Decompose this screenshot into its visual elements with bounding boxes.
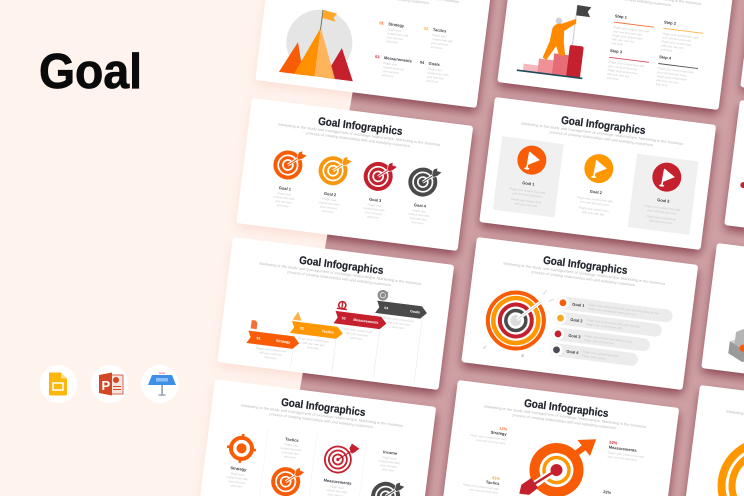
text: 04 Goals <box>417 60 451 85</box>
step 4: your own text and more <box>657 70 687 78</box>
goal pill 1 <box>556 296 673 323</box>
slide intro text: Marketing is the study and management of exchange relationships. Marketing is the business <box>521 122 684 146</box>
text: 04 Goals: content here with <box>427 71 449 77</box>
goal 4: and more <box>412 220 424 226</box>
panel: goal 2: your own text and more <box>580 199 610 207</box>
goal 3: Goal 3 <box>369 196 382 203</box>
text: 02 Tactics <box>422 26 455 51</box>
step 04 Goals: with your own text <box>387 320 410 327</box>
label: 41% Tactics: Plugin your content here with <box>463 482 499 491</box>
label: 12% Strategy: Strategy <box>490 430 508 437</box>
panel: goal 3: Plugin your content here with <box>644 204 681 212</box>
label: 12% Strategy: 12% <box>499 426 508 432</box>
step 2: your own text and more <box>662 35 692 43</box>
slide: mountain goal <box>255 0 492 108</box>
label: 41% Tactics: your own text and more <box>469 487 499 495</box>
step 3: your own text and more <box>608 64 638 71</box>
column: Tactics: content here with <box>280 446 302 452</box>
text: 02 Tactics: Plugin your <box>432 33 446 39</box>
slide: target with arrows and percentages <box>442 380 679 496</box>
pink background panel <box>300 0 744 496</box>
text: 03 Measurements: and more <box>382 73 394 78</box>
goal 4 <box>403 164 443 227</box>
label: 52% Measurements: 52% <box>609 439 618 446</box>
slide heading: Goal Infographics <box>317 116 403 138</box>
slide intro text <box>297 0 460 9</box>
panel: goal 1: your own text and more <box>512 191 542 199</box>
step 03 Measurements <box>332 300 388 344</box>
step 01 Strategy: 01 <box>256 336 261 341</box>
text: 02 Tactics: Tactics <box>433 27 447 34</box>
goal 4: Plugin your <box>412 208 426 214</box>
text: 02 Tactics: and more <box>431 45 443 50</box>
step 2: Plugin your content here <box>661 39 692 47</box>
step 3: Step 3 <box>610 48 623 54</box>
label: 23%: 23% <box>603 489 612 495</box>
column: Strategy <box>222 432 258 490</box>
text: 02 Tactics: 02 <box>424 26 430 31</box>
step 3: Plugin your content here with <box>608 60 645 68</box>
step 1: Plugin your content here with <box>613 25 650 34</box>
step 02 Tactics: with your own text <box>302 341 325 347</box>
label: 41% Tactics <box>462 472 501 495</box>
slide intro text <box>521 122 684 151</box>
slide intro text: process of creating relationships with and satisfying customers. <box>512 413 617 430</box>
goal 2 <box>313 153 353 216</box>
panel: goal 3: Plugin your content here <box>646 214 677 222</box>
slide intro text <box>539 0 702 11</box>
slide heading: Goal Infographics <box>280 397 366 419</box>
goal pill 3 <box>551 327 651 352</box>
icon: PowerPoint: P <box>102 378 110 393</box>
slide intro text: Marketing is the study and management of exchange relationships. Marketing is the business <box>484 405 647 429</box>
column: Measurements: Measurements <box>323 477 353 486</box>
label: 52% Measurements <box>607 439 646 463</box>
slide: concentric target with goal pills <box>461 237 698 390</box>
step 03 Measurements: 03 <box>341 316 346 321</box>
slide: three flag panels <box>479 97 716 250</box>
step 4 <box>655 54 699 91</box>
column: Income: Income <box>383 449 398 456</box>
step 02 Tactics <box>288 311 345 353</box>
step 2 <box>660 19 704 56</box>
step 01 Strategy <box>245 320 301 363</box>
column: Income: your own text <box>380 463 397 469</box>
goal 1: Goal 1 <box>279 185 292 192</box>
panel: goal 2: Goal 2 <box>590 189 603 195</box>
slide intro text: process of creating relationships with and satisfying customers. <box>306 131 411 148</box>
goal 4: Goal 4 <box>413 202 427 209</box>
slide intro text <box>484 405 647 434</box>
goal pill 4: Plugin your content here with <box>582 350 619 358</box>
icon: isometric block <box>727 327 744 364</box>
step 1 <box>611 13 655 50</box>
label: 12% Strategy: your own text and more <box>476 438 506 445</box>
slide heading: Goal Infographics <box>523 398 609 420</box>
slide heading: Goal Infographics <box>560 115 646 137</box>
text: 01 Strategy: and more <box>386 39 399 45</box>
column: Measurements: Plugin your <box>330 484 344 490</box>
goal pill 1: Plugin your content here with your own text and more text <box>588 303 660 315</box>
column: Tactics: and more <box>284 454 296 460</box>
slide intro text: Marketing is the study and management of exchange relationships. Marketing is the business <box>259 262 422 286</box>
text: 04 Goals: your own text <box>427 75 444 81</box>
goal pill 4: Goal 4 <box>566 349 580 355</box>
goal 1: content here with <box>273 194 295 201</box>
panel: goal 3: with your own text <box>649 218 672 225</box>
column: Income: and more <box>382 467 395 473</box>
step 4: Step 4 <box>659 54 672 61</box>
step 02 Tactics: and more <box>307 345 319 351</box>
text: 01 Strategy <box>377 20 410 46</box>
step 04 Goals <box>373 289 429 333</box>
step 1: Step 1 <box>615 13 628 20</box>
goal 4: content here with <box>408 211 430 218</box>
slide: flag climb steps <box>497 0 734 110</box>
step 1: and more <box>611 41 624 47</box>
panel: goal 1: Plugin your content here <box>511 197 542 205</box>
goal pill 4 <box>549 343 639 367</box>
step 03 Measurements: Measurements <box>353 318 379 325</box>
label: 52% Measurements: Plugin your content here with <box>608 450 645 459</box>
label: 12% Strategy <box>469 422 508 446</box>
text: 01 Strategy: Plugin your <box>387 27 402 33</box>
slide: right edge isometric blocks <box>701 243 744 396</box>
panel: goal 3: Goal 3 <box>657 197 671 204</box>
column: Strategy: Strategy <box>230 465 247 472</box>
text: 01 Strategy: Strategy <box>388 21 405 28</box>
text: 01 Strategy: content here with <box>387 31 409 38</box>
goal pill 4: Plugin your content <box>582 354 606 361</box>
text: 03 Measurements <box>373 54 413 80</box>
text: 04 Goals: Plugin your <box>428 67 442 72</box>
step 03 Measurements: Plugin your content here <box>342 326 373 334</box>
panel: goal 3: your own text and more <box>647 208 677 216</box>
step 3: with your own text <box>607 72 630 79</box>
column: Income <box>369 448 409 496</box>
column: Strategy: Plugin your <box>231 471 245 477</box>
step 4: Plugin your content here with <box>657 66 694 75</box>
step 02 Tactics: Tactics <box>322 329 334 335</box>
label: 12% Strategy: Plugin your content here with <box>470 433 507 442</box>
column: Strategy: your own text <box>228 479 245 485</box>
slide intro text <box>241 404 404 433</box>
step 01 Strategy: and more <box>264 355 277 360</box>
goal 3: content here with <box>363 206 385 213</box>
column: Income: content here with <box>378 459 400 465</box>
goal pill 2 <box>553 311 663 337</box>
panel: goal 1: with your own text <box>514 201 537 208</box>
goal pill 3: Plugin your content here with your own <box>584 334 633 344</box>
icon: concentric rings <box>716 437 744 496</box>
slide intro text <box>259 262 422 291</box>
slide intro text <box>503 262 666 291</box>
column: Tactics: Tactics <box>285 436 300 443</box>
label: 52% Measurements: your own text and more <box>607 454 637 462</box>
slide: right edge second <box>724 100 744 253</box>
illustration: mountain with flag <box>279 5 361 81</box>
goal 1: your own text <box>275 199 292 205</box>
slide: staggered arrow ribbons <box>217 237 454 390</box>
step 2: Plugin your content here with <box>662 31 699 40</box>
text: 03 Measurements: content here with <box>383 65 405 72</box>
step 1: Plugin your content here <box>612 33 643 41</box>
illustration: person planting flag on bars <box>517 0 591 79</box>
step 04 Goals: Plugin your content here <box>384 316 415 323</box>
text: 03 Measurements: your own text <box>382 69 399 75</box>
text: 01 Strategy: your own text <box>386 35 404 41</box>
panel: goal 2: Plugin your content here with <box>577 195 614 204</box>
slide intro text: process of creating relationships with and satisfying customers. <box>287 270 392 287</box>
chart: concentric target <box>483 283 555 360</box>
panel: goal 1: Goal 1 <box>522 180 536 187</box>
slide intro text: Marketing is the study and management of exchange relationships. Marketing is the business <box>278 123 441 147</box>
goal 1: and more <box>277 203 289 208</box>
column: Measurements <box>320 441 360 496</box>
slide heading: Goal Infographics <box>542 255 628 277</box>
text: 04 Goals: and more <box>426 78 439 84</box>
panel: goal 1: Plugin your content here with <box>509 187 546 195</box>
goal pill 2: Plugin your content here with <box>586 322 622 330</box>
goal 3: and more <box>367 214 380 220</box>
goal 2: Goal 2 <box>324 191 337 197</box>
slide: four goal targets <box>236 98 473 251</box>
icon: Google Slides <box>40 365 78 403</box>
step 02 Tactics: Plugin your content here <box>298 336 329 344</box>
text: 03 Measurements: Measurements <box>384 55 413 64</box>
step 3: Plugin your content here <box>607 68 638 76</box>
step 1: with your own text <box>612 37 635 44</box>
slide intro text: process of creating relationships with and satisfying customers. <box>549 130 654 147</box>
step 04 Goals: Goals <box>410 309 420 315</box>
step 3: and more <box>606 76 619 81</box>
column: Measurements: content here with <box>326 488 348 494</box>
slide heading: Goal Infographics <box>298 255 384 277</box>
step 2: with your own text <box>661 43 684 50</box>
goal 1: Plugin your <box>277 191 292 197</box>
goal 1 <box>268 147 308 210</box>
goal 3: your own text <box>365 210 382 216</box>
step 01 Strategy: Plugin your content here <box>256 346 287 354</box>
column: Strategy: content here with <box>226 475 249 481</box>
goal pill 1: Plugin your content here with your own <box>588 306 636 317</box>
text: 03 Measurements: Plugin your <box>383 61 398 67</box>
slide intro text: process of creating relationships with and satisfying customers. <box>531 270 636 287</box>
goal 2: Plugin your <box>322 197 337 202</box>
goal pill 3: Goal 3 <box>568 333 582 339</box>
slide: right edge concentric target <box>683 385 744 496</box>
text: 02 Tactics: content here with <box>432 37 454 44</box>
panel: goal 3 <box>628 154 699 235</box>
slide intro text: process of creating relationships with and satisfying customers. <box>269 412 374 429</box>
text: 02 Tactics: your own text <box>431 41 448 47</box>
icon: Keynote <box>141 365 179 403</box>
goal pill 2: Plugin your content here with your own text <box>586 318 640 329</box>
goal 2: your own text <box>320 204 337 210</box>
step 02 Tactics: 02 <box>300 326 304 331</box>
column: Tactics: Plugin your <box>284 442 299 448</box>
goal pill 2: Goal 2 <box>570 317 584 323</box>
label: 52% Measurements: Measurements <box>608 444 638 453</box>
step 4: with your own text <box>656 78 679 85</box>
column: Tactics: your own text <box>282 450 299 456</box>
chart: target with arrows <box>519 431 596 496</box>
step 01 Strategy: Strategy <box>276 339 290 344</box>
panel: goal 2: with your own text <box>582 210 605 217</box>
label: 41% Tactics: Tactics <box>486 479 500 486</box>
slide intro text <box>278 123 441 152</box>
slide intro text: Marketing is the study and management of exchange relationships. Marketing is the business <box>241 404 404 428</box>
step 4: Plugin your content here <box>656 74 687 82</box>
step 2: and more <box>660 47 673 53</box>
slide: right edge top <box>740 0 744 115</box>
column: Income: Plugin your <box>382 455 397 461</box>
column: Tactics <box>269 435 309 496</box>
app icons row <box>40 365 179 403</box>
slide: crosshair and target icon columns <box>199 379 436 496</box>
step 01 Strategy: with your own text <box>259 350 282 357</box>
step 04 Goals: 04 <box>384 306 389 311</box>
goal 2: content here with <box>318 200 340 207</box>
goal 3: Plugin your <box>367 202 382 208</box>
slide intro text: Marketing is the study and management of exchange relationships. Marketing is the business <box>503 262 666 286</box>
step 03 Measurements: with your own text <box>345 331 368 338</box>
step 1: your own text and more <box>613 29 643 37</box>
column: Strategy: and more <box>230 483 243 489</box>
text: 03 Measurements: 03 <box>375 54 381 59</box>
step 3 <box>606 48 650 85</box>
text: 04 Goals: 04 <box>419 60 425 65</box>
label: 41% Tactics: 41% <box>492 475 501 481</box>
step 04 Goals: and more <box>392 325 405 330</box>
column rules <box>291 303 422 383</box>
goal 3 <box>358 159 398 221</box>
goal 2: and more <box>322 209 334 214</box>
step 03 Measurements: and more <box>350 336 363 341</box>
text: 04 Goals: Goals <box>428 61 441 67</box>
goal 4: your own text <box>410 216 427 222</box>
main heading: Goal <box>39 45 142 99</box>
goal pill 3: Plugin your content here <box>584 338 615 346</box>
step 4: and more <box>655 82 668 87</box>
panel: goal 2: Plugin your content here <box>578 205 609 213</box>
goal pill 1: Goal 1 <box>572 301 586 308</box>
panel: goal 1 <box>493 136 564 217</box>
text: 01 Strategy: 01 <box>379 20 385 26</box>
panel: goal 2 <box>575 152 619 218</box>
step 2: Step 2 <box>664 19 677 26</box>
